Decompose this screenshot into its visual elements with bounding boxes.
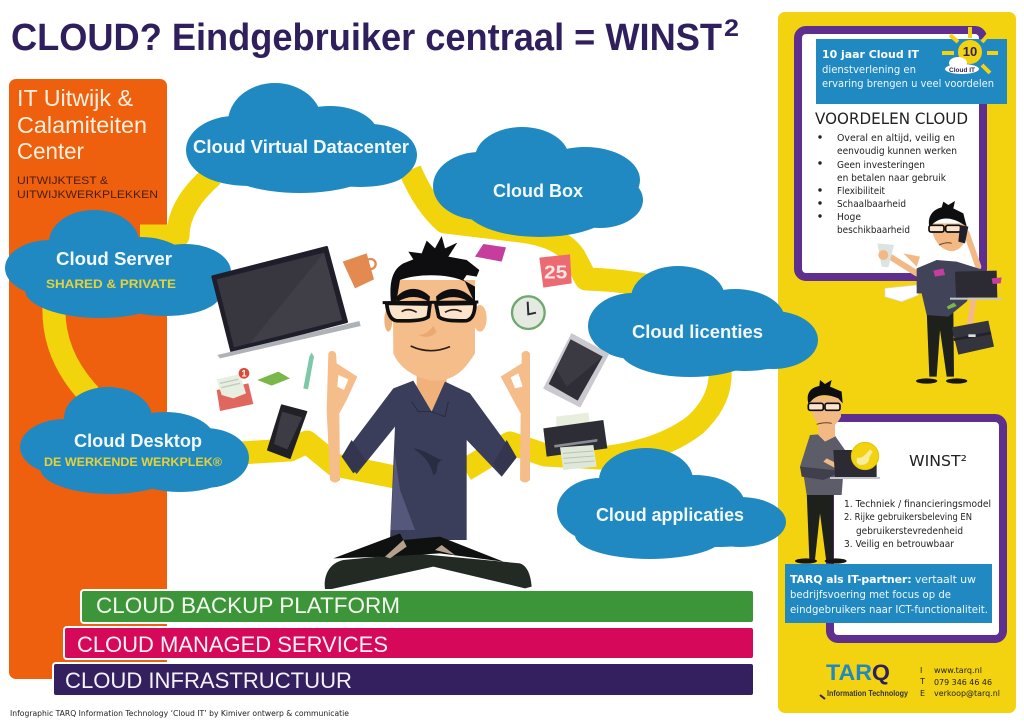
- list: winst: 2. Rijke gebruikersbeleving EN: [844, 512, 972, 523]
- callout: 10 jaar: dienstverlening en: [822, 63, 916, 76]
- heading: IT Uitwijk: Calamiteiten: [17, 112, 147, 138]
- briefcase: [952, 321, 994, 355]
- bar: Cloud Managed Services: CLOUD MANAGED SERVICES: [77, 632, 388, 657]
- logo: TARQ Information Technology: TARQ: [826, 660, 890, 685]
- panel: winst: [830, 418, 1003, 639]
- icon: calendar: 25: [544, 261, 567, 282]
- panel: IT Uitwijk en Calamiteiten Center: [9, 79, 167, 679]
- yellow cloud outline: [54, 170, 720, 478]
- icon: envelope with badge: 1: [241, 369, 246, 379]
- list: voordelen: eenvoudig kunnen werken: [837, 146, 957, 157]
- heading: IT Uitwijk: IT Uitwijk &: [17, 85, 133, 111]
- legs: [807, 492, 833, 559]
- torso: [800, 433, 845, 495]
- icon: 10 jaar sun: 10: [963, 44, 977, 59]
- contact details: I: [920, 666, 922, 675]
- icon: mug: [343, 253, 376, 288]
- footer credit: Infographic TARQ Information Technology ‘Cloud IT’ by Kimiver ontwerp & communicatie: [10, 709, 349, 718]
- icon: pencil: [303, 353, 314, 389]
- cloud: Cloud Desktop: [20, 387, 249, 494]
- head: [809, 397, 841, 428]
- icon: laptop: [213, 247, 361, 358]
- cloud: Cloud Desktop: Cloud Desktop: [74, 431, 202, 451]
- contact details: verkoop@tarq.nl: [934, 689, 1000, 698]
- callout: TARQ als IT-partner: TARQ als IT-partner: vertaalt uw: [790, 573, 976, 586]
- heading: winst: WINST²: [909, 452, 967, 470]
- panel: yellow sidebar: [778, 12, 1016, 713]
- list: voordelen: [818, 133, 957, 236]
- purple frame: [798, 30, 983, 277]
- cloud: Cloud Desktop: DE WERKENDE WERKPLEK®: [44, 457, 223, 469]
- title: CLOUD? Eindgebruiker centraal = WINST: [11, 17, 722, 59]
- closed eyes, nose, mouth: [402, 310, 462, 312]
- heading: voordelen cloud: VOORDELEN CLOUD: [815, 109, 968, 128]
- arms: [327, 351, 530, 482]
- torso: [917, 260, 983, 317]
- icon: 10 jaar sun: Cloud IT: [949, 67, 975, 74]
- shirt: [342, 381, 517, 540]
- list: voordelen: Schaalbaarheid: [837, 199, 906, 210]
- contact details: [919, 666, 1000, 698]
- main illustration: meditating man with devices: [213, 236, 608, 589]
- list: voordelen: en betalen naar gebruik: [837, 173, 946, 184]
- purple frame: [830, 418, 1003, 639]
- legs: [927, 310, 954, 377]
- contact details: www.tarq.nl: [934, 666, 982, 675]
- text: uitwijktest: UITWIJKWERKPLEKKEN: [17, 189, 158, 201]
- title: 2: [724, 15, 739, 42]
- arms: [890, 233, 978, 323]
- shoes: [795, 558, 817, 564]
- contact details: 079 346 46 46: [934, 678, 992, 687]
- list: winst: 3. Veilig en betrouwbaar: [844, 539, 954, 550]
- laptop: [833, 450, 877, 477]
- cloud: Cloud licenties: Cloud licenties: [632, 322, 763, 342]
- list: voordelen: Geen investeringen: [837, 160, 925, 171]
- cup: [877, 243, 894, 267]
- list: voordelen: beschikbaarheid: [837, 225, 910, 236]
- figure: meditating man: [325, 236, 532, 589]
- list: winst: [844, 499, 991, 550]
- head: [931, 223, 967, 251]
- callout: TARQ als IT-partner: bedrijfsvoering met focus op de: [790, 588, 951, 601]
- cloud: Cloud applicaties: Cloud applicaties: [596, 505, 744, 525]
- logo: TARQ Information Technology: Information Technology: [827, 689, 908, 698]
- shoes: [916, 378, 937, 384]
- cloud: Cloud applicaties: [557, 448, 786, 559]
- icon: calendar: [539, 254, 572, 288]
- text: uitwijktest: UITWIJKTEST &: [17, 175, 109, 187]
- list: winst: gebruikerstevredenheid: [856, 526, 963, 537]
- face: [384, 308, 392, 332]
- icon: green note: [257, 372, 290, 386]
- heading: IT Uitwijk: [17, 85, 147, 164]
- eyebrows: [395, 289, 474, 303]
- icon: pink note: [475, 244, 506, 262]
- cloud: Cloud Box: Cloud Box: [493, 181, 583, 201]
- legs: [325, 553, 532, 589]
- hair: [390, 236, 479, 308]
- contact details: E: [920, 689, 925, 698]
- callout: 10 jaar: 10 jaar Cloud IT: [822, 48, 919, 61]
- list: voordelen: Hoge: [837, 212, 861, 223]
- cloud: Cloud Box: [433, 127, 643, 237]
- icon: envelope with badge: [217, 368, 253, 411]
- icon: phone: [268, 405, 307, 458]
- panel: voordelen cloud: [798, 27, 1007, 277]
- icon: printer: [543, 413, 607, 470]
- bar: Cloud Infrastructuur: CLOUD INFRASTRUCTUUR: [65, 668, 352, 693]
- bar: Cloud Infrastructuur: [52, 662, 755, 697]
- text: uitwijktest: [17, 175, 158, 201]
- bar: Cloud Managed Services: [63, 626, 755, 660]
- callout: TARQ als IT-partner: eindgebruikers naar ICT-functionaliteit.: [790, 603, 988, 616]
- cloud: Cloud Server: Cloud Server: [56, 249, 172, 269]
- bar: Cloud Backup Platform: [80, 589, 755, 624]
- laptop: [955, 271, 997, 298]
- paper stack: [885, 285, 918, 302]
- cloud: Cloud Server: SHARED & PRIVATE: [46, 277, 176, 291]
- contact details: T: [919, 677, 925, 686]
- callout: 10 jaar: ervaring brengen u veel voordelen: [822, 77, 994, 90]
- callout: 10 jaar: [816, 39, 1007, 104]
- heading: IT Uitwijk: Center: [17, 138, 84, 164]
- list: voordelen: Overal en altijd, veilig en: [837, 133, 955, 144]
- cloud: Cloud Virtual Datacenter: [186, 83, 417, 193]
- bar: Cloud Backup Platform: CLOUD BACKUP PLATFORM: [96, 593, 400, 618]
- glasses: [387, 303, 475, 321]
- neck: [417, 367, 447, 412]
- icon: tablet: [544, 334, 608, 407]
- logo: TARQ Information Technology: [820, 660, 908, 699]
- list: winst: 1. Techniek / financieringsmodel: [844, 499, 991, 510]
- cloud: Cloud Server: [5, 210, 231, 318]
- figure: man with laptop and thumbs up: [795, 380, 880, 564]
- phone: [958, 225, 968, 243]
- cloud: Cloud licenties: [588, 266, 818, 377]
- icon: thumbs up badge: [851, 442, 879, 470]
- callout: TARQ als IT-partner: [785, 564, 992, 623]
- list: voordelen: Flexibiliteit: [837, 186, 885, 197]
- cloud: Cloud Virtual Datacenter: Cloud Virtual Datacenter: [193, 137, 409, 157]
- icon: clock: [512, 296, 545, 329]
- icon: 10 jaar sun: [942, 27, 998, 74]
- figure: man on phone with laptop and briefcase: [877, 201, 1002, 384]
